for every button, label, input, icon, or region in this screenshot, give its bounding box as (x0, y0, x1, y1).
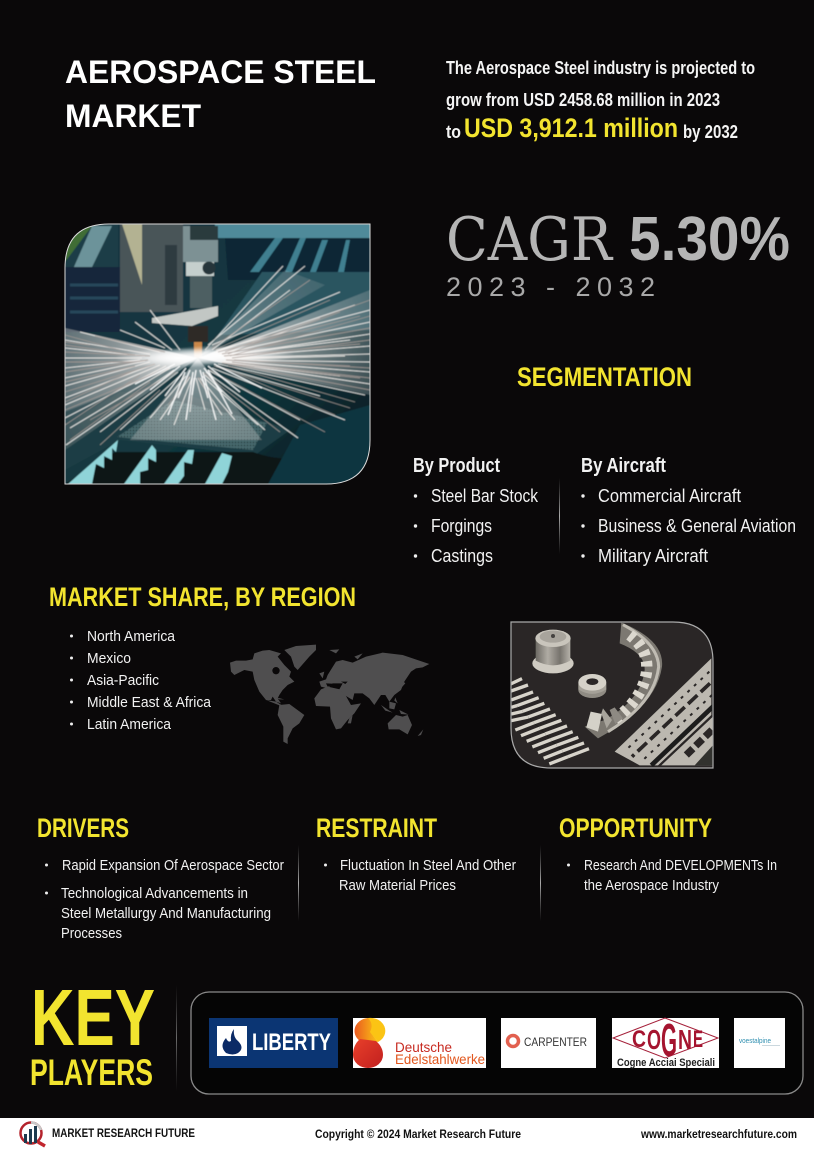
panel: opportunity (559, 813, 777, 894)
logo: Liberty (209, 1018, 338, 1068)
panel: restraint: Fluctuation In Steel And Other (340, 857, 516, 874)
logo: Carpenter (501, 1018, 596, 1068)
region list: Middle East & Africa (87, 694, 212, 711)
segment list: by product (413, 455, 539, 566)
footer: MARKET RESEARCH FUTURE (52, 1126, 195, 1140)
logo: voestalpine: voestalpine (739, 1038, 771, 1045)
panel: drivers: Rapid Expansion Of Aerospace Sector (62, 857, 284, 874)
CAGR figure: CAGR (446, 205, 614, 275)
region list: Asia-Pacific (87, 672, 159, 689)
segment list: by aircraft: Military Aircraft (598, 546, 708, 566)
title: AEROSPACE STEEL (65, 54, 376, 90)
segment list: by aircraft (581, 455, 796, 566)
logo: Cogne: Cogne Acciai Speciali (617, 1057, 715, 1069)
panel: restraint (316, 813, 516, 894)
title: MARKET (65, 98, 201, 134)
logo: Cogne: O (647, 1024, 661, 1055)
logo: Liberty: LIBERTY (252, 1029, 331, 1056)
panel: restraint: Raw Material Prices (339, 877, 456, 894)
panel: opportunity: Research And DEVELOPMENTs In (584, 857, 777, 874)
panel: drivers: Steel Metallurgy And Manufacturing (61, 905, 271, 922)
panel: drivers (37, 813, 284, 942)
icon: magnifier logo (20, 1122, 45, 1146)
logo: Cogne: C (632, 1026, 646, 1053)
panel: drivers: DRIVERS (37, 813, 129, 843)
title (65, 54, 376, 134)
panel: key player logos (191, 992, 803, 1094)
segment list: by product: Forgings (431, 516, 492, 536)
panel: opportunity: the Aerospace Industry (584, 877, 719, 894)
logo: Cogne (612, 1014, 719, 1069)
panel: drivers: Technological Advancements in (61, 885, 248, 902)
segment list: by product: Castings (431, 546, 493, 566)
logo: Cogne: N (678, 1024, 692, 1055)
footer: Copyright © 2024 Market Research Future (315, 1127, 521, 1141)
photo: machined steel parts (506, 620, 716, 770)
market projection text: to (446, 122, 461, 142)
heading: key players: PLAYERS (30, 1052, 153, 1093)
heading: market share by region: MARKET SHARE, BY REGION (49, 582, 356, 612)
panel: opportunity: OPPORTUNITY (559, 813, 712, 843)
logo: Deutsche Edelstahlwerke: Edelstahlwerke (395, 1051, 485, 1067)
footer (0, 1118, 814, 1150)
market projection text: USD 3,912.1 million (464, 113, 678, 143)
logo: Cogne: G (661, 1014, 677, 1066)
market projection text (446, 58, 755, 143)
market projection text: by 2032 (683, 122, 738, 142)
logo: Cogne: E (693, 1026, 703, 1053)
CAGR figure (446, 205, 790, 302)
heading: key players (30, 973, 155, 1093)
segment list: by product: By Product (413, 455, 500, 477)
heading: segmentation: SEGMENTATION (517, 362, 692, 392)
world map (230, 645, 429, 744)
region list: North America (87, 628, 176, 645)
logo: Deutsche Edelstahlwerke (353, 1018, 486, 1068)
heading: key players: KEY (31, 973, 155, 1062)
logo: voestalpine (734, 1018, 785, 1068)
CAGR figure: 5.30% (629, 205, 790, 274)
region list: Mexico (87, 650, 131, 667)
region list (70, 628, 212, 733)
logo: Deutsche Edelstahlwerke: Deutsche (395, 1039, 452, 1055)
panel: restraint: RESTRAINT (316, 813, 437, 843)
CAGR figure: 2023 - 2032 (446, 272, 655, 302)
region list: Latin America (87, 716, 172, 733)
market projection text: grow from USD 2458.68 million in 2023 (446, 90, 720, 110)
segment list: by aircraft: By Aircraft (581, 455, 666, 477)
logo: Carpenter: CARPENTER (524, 1035, 587, 1049)
panel: drivers: Processes (61, 925, 122, 942)
photo: laser cutting sparks (65, 224, 370, 484)
segment list: by product: Steel Bar Stock (431, 486, 539, 506)
segment list: by aircraft: Commercial Aircraft (598, 486, 741, 506)
